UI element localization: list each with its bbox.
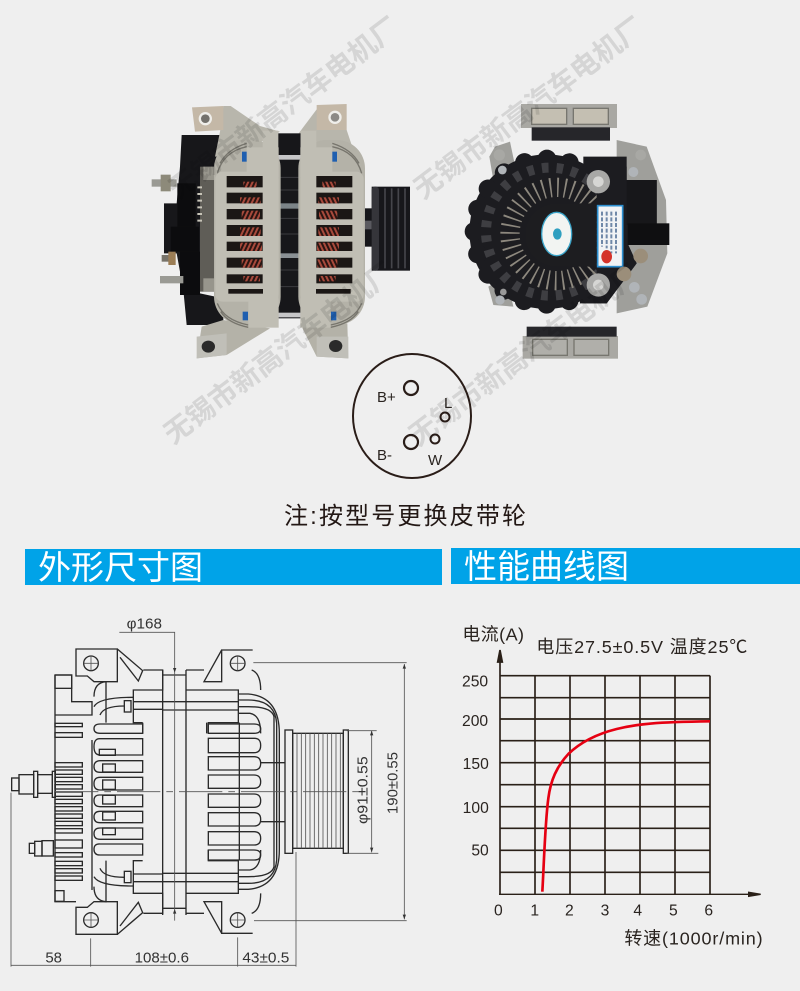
label B+: B+ [377,389,396,406]
centre line [55,790,365,793]
section header: dimensions [25,549,442,586]
current curve [542,721,710,892]
aluminium housing, right half [298,131,365,328]
x axis labels: 4 [633,902,642,919]
x axis labels: 3 [601,902,610,919]
dimension: phi 91: φ91±0.55 [355,756,372,824]
terminal hole: B- [404,435,418,449]
dimension: 190: 190±0.55 [384,752,401,814]
terminal hole: B+ [404,381,418,395]
mounting brackets [192,104,353,358]
x axis labels: 6 [704,902,713,919]
y axis labels: 250 [462,673,488,690]
black scalloped cover [469,154,657,309]
x axis labels: 5 [669,902,678,919]
technical drawing [11,615,407,967]
y axis labels [462,673,489,860]
x axis labels [494,902,713,919]
watermarks: 无锡市新高汽车电机厂 [403,259,645,452]
y axis labels: 200 [462,713,488,730]
dimension arrowheads [173,664,406,919]
central boss and connector [525,167,669,303]
stator band [277,133,301,318]
terminal layout diagram [353,354,471,478]
black terminal housing [164,135,223,325]
y axis arrow [498,650,502,894]
dimension lines [11,632,407,967]
watermarks: 无锡市新高汽车电机厂 [163,12,405,205]
watermarks: 无锡市新高汽车电机厂 [158,257,400,450]
x axis arrow [499,892,761,896]
aluminium housing, left half [214,131,281,328]
upper half of housing and lugs [76,649,279,792]
x axis labels: 0 [494,902,503,919]
dimension: phi 168: φ168 [127,615,162,632]
x axis labels: 1 [530,902,539,919]
chart grid [500,676,710,894]
outer vent holes [486,168,614,296]
terminal stud: lower [29,841,53,856]
y axis labels: 100 [463,800,489,817]
terminal studs [152,175,183,283]
test conditions: 电压27.5±0.5V 温度25℃ [536,637,747,657]
watermarks: 无锡市新高汽车电机厂 [408,12,650,205]
y axis labels: 150 [463,756,489,773]
section header: dimensions: 外形尺寸图 [38,549,203,586]
round sticker [542,212,572,256]
dimension: 43: 43±0.5 [242,949,289,966]
metal frame corners [488,140,667,313]
y axis title: 电流(A) [462,624,524,644]
label L: L [444,395,452,412]
x axis labels: 2 [565,902,574,919]
note text: 注:按型号更换皮带轮 [284,503,526,530]
watermarks [158,12,650,452]
bolts [494,149,648,305]
terminal hole: L [440,412,450,422]
dimension: 58: 58 [45,949,62,966]
y axis labels: 50 [471,843,489,860]
terminal hole: W [430,434,440,444]
centre body lines [143,670,207,915]
bottom bracket [523,327,618,359]
rear heat sink [55,675,93,902]
nameplate [598,206,623,267]
label B-: B- [377,447,392,464]
photo: alternator rear view [469,104,669,359]
right cooling fins [208,723,285,860]
dimension: 108: 108±0.6 [135,949,189,966]
terminal stud: upper [12,771,55,797]
photo: alternator side view [152,104,410,358]
section header: performance: 性能曲线图 [464,548,629,585]
left cooling fins [94,724,143,855]
pulley [285,730,348,853]
pulley [363,187,410,271]
top bracket [521,104,617,141]
label W: W [428,452,443,469]
section header: performance [451,548,800,585]
inner radial slots [510,187,603,281]
performance chart [462,624,763,949]
x axis title: 转速(1000r/min) [624,929,763,949]
lower half of housing and lugs [76,792,279,934]
